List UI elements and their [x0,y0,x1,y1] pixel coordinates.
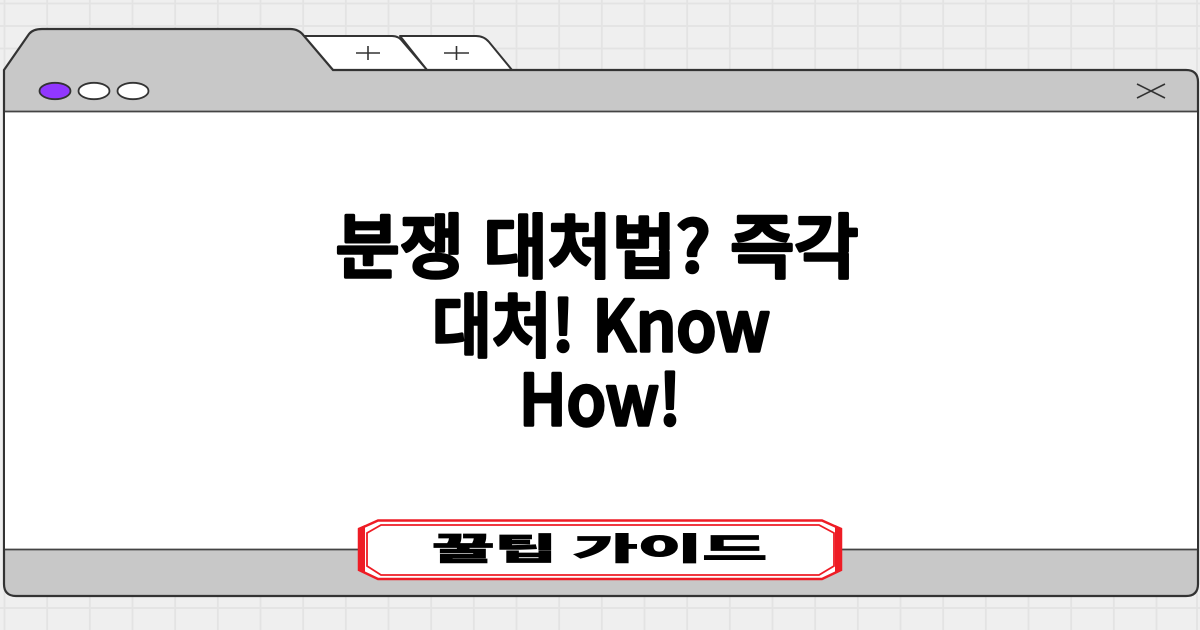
badge: honey tip guide: 가이드 [573,524,767,569]
title: 분쟁 대처법? 즉각 [336,192,858,293]
tab: plus one [300,36,427,70]
title: How! [519,345,681,446]
tab: plus two [400,36,512,70]
window dots [40,83,148,99]
title: 대처! Know [432,271,770,372]
badge: honey tip guide: 꿀팁 [432,524,557,569]
badge: honey tip guide [358,520,842,579]
icon: close [1137,84,1165,98]
title [336,192,858,446]
content area [5,112,1197,550]
